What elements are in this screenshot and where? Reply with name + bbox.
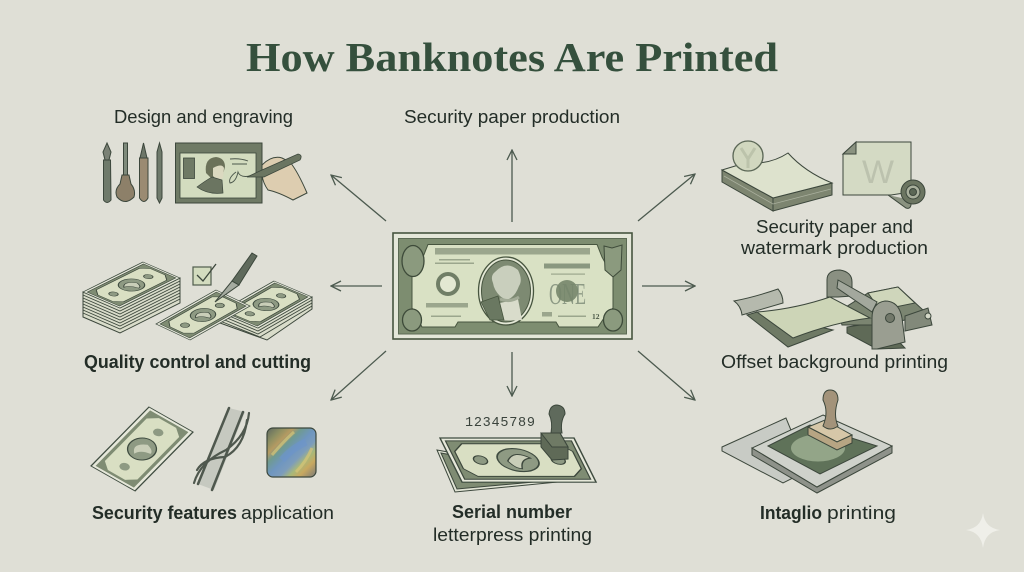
- icon: serial number banknotes: [437, 438, 596, 492]
- arrows: [331, 150, 695, 400]
- icon: checkbox: [193, 264, 216, 285]
- icon: cutting knife: [215, 253, 257, 302]
- icon: intaglio press: [722, 390, 892, 493]
- icon: offset press: [734, 270, 932, 349]
- label: intaglio printing: Intaglio: [760, 503, 822, 523]
- icon: security banknote: [91, 407, 193, 491]
- serial number text: 12345789: [465, 416, 535, 431]
- label: serial number letterpress printing: Serial number: [452, 502, 572, 522]
- icon: engraving plate with hand: [176, 143, 307, 203]
- icon: sparkle: [966, 513, 1000, 548]
- label: serial number letterpress printing: letterpress printing: [433, 525, 592, 545]
- watermark letter: W: [862, 154, 895, 190]
- small number: 12: [592, 312, 600, 321]
- icon: security thread: [194, 408, 249, 490]
- numeral word: ONE: [549, 276, 586, 311]
- icon: watermark sheet with seal: [843, 142, 925, 208]
- title: How Banknotes Are Printed: [246, 34, 778, 80]
- label: security paper and watermark production: [740, 217, 928, 258]
- label: security paper and watermark production: watermark production: [740, 238, 928, 258]
- label: security paper and watermark production: Security paper and: [756, 217, 913, 237]
- center banknote: [393, 233, 632, 339]
- icon: cut banknote: [156, 290, 250, 340]
- icon: hologram foil: [267, 428, 316, 477]
- label: offset background printing: Offset background printing: [721, 352, 948, 372]
- icon: numbering stamp: [541, 405, 568, 460]
- label: serial number letterpress printing: [433, 502, 592, 545]
- icon: banknote stack right: [220, 281, 312, 340]
- label: security paper production: Security paper production: [404, 107, 620, 127]
- label: quality control and cutting: Quality control and cutting: [84, 352, 311, 372]
- label: security features application: application: [241, 503, 334, 523]
- label: intaglio printing: printing: [827, 503, 896, 523]
- icon: paper stack with magnifier: [722, 141, 832, 211]
- icon: banknote stack: [83, 262, 180, 333]
- label: design and engraving: Design and engraving: [114, 107, 293, 127]
- label: security features application: Security features: [92, 503, 237, 523]
- icon: engraving tools: [103, 143, 162, 203]
